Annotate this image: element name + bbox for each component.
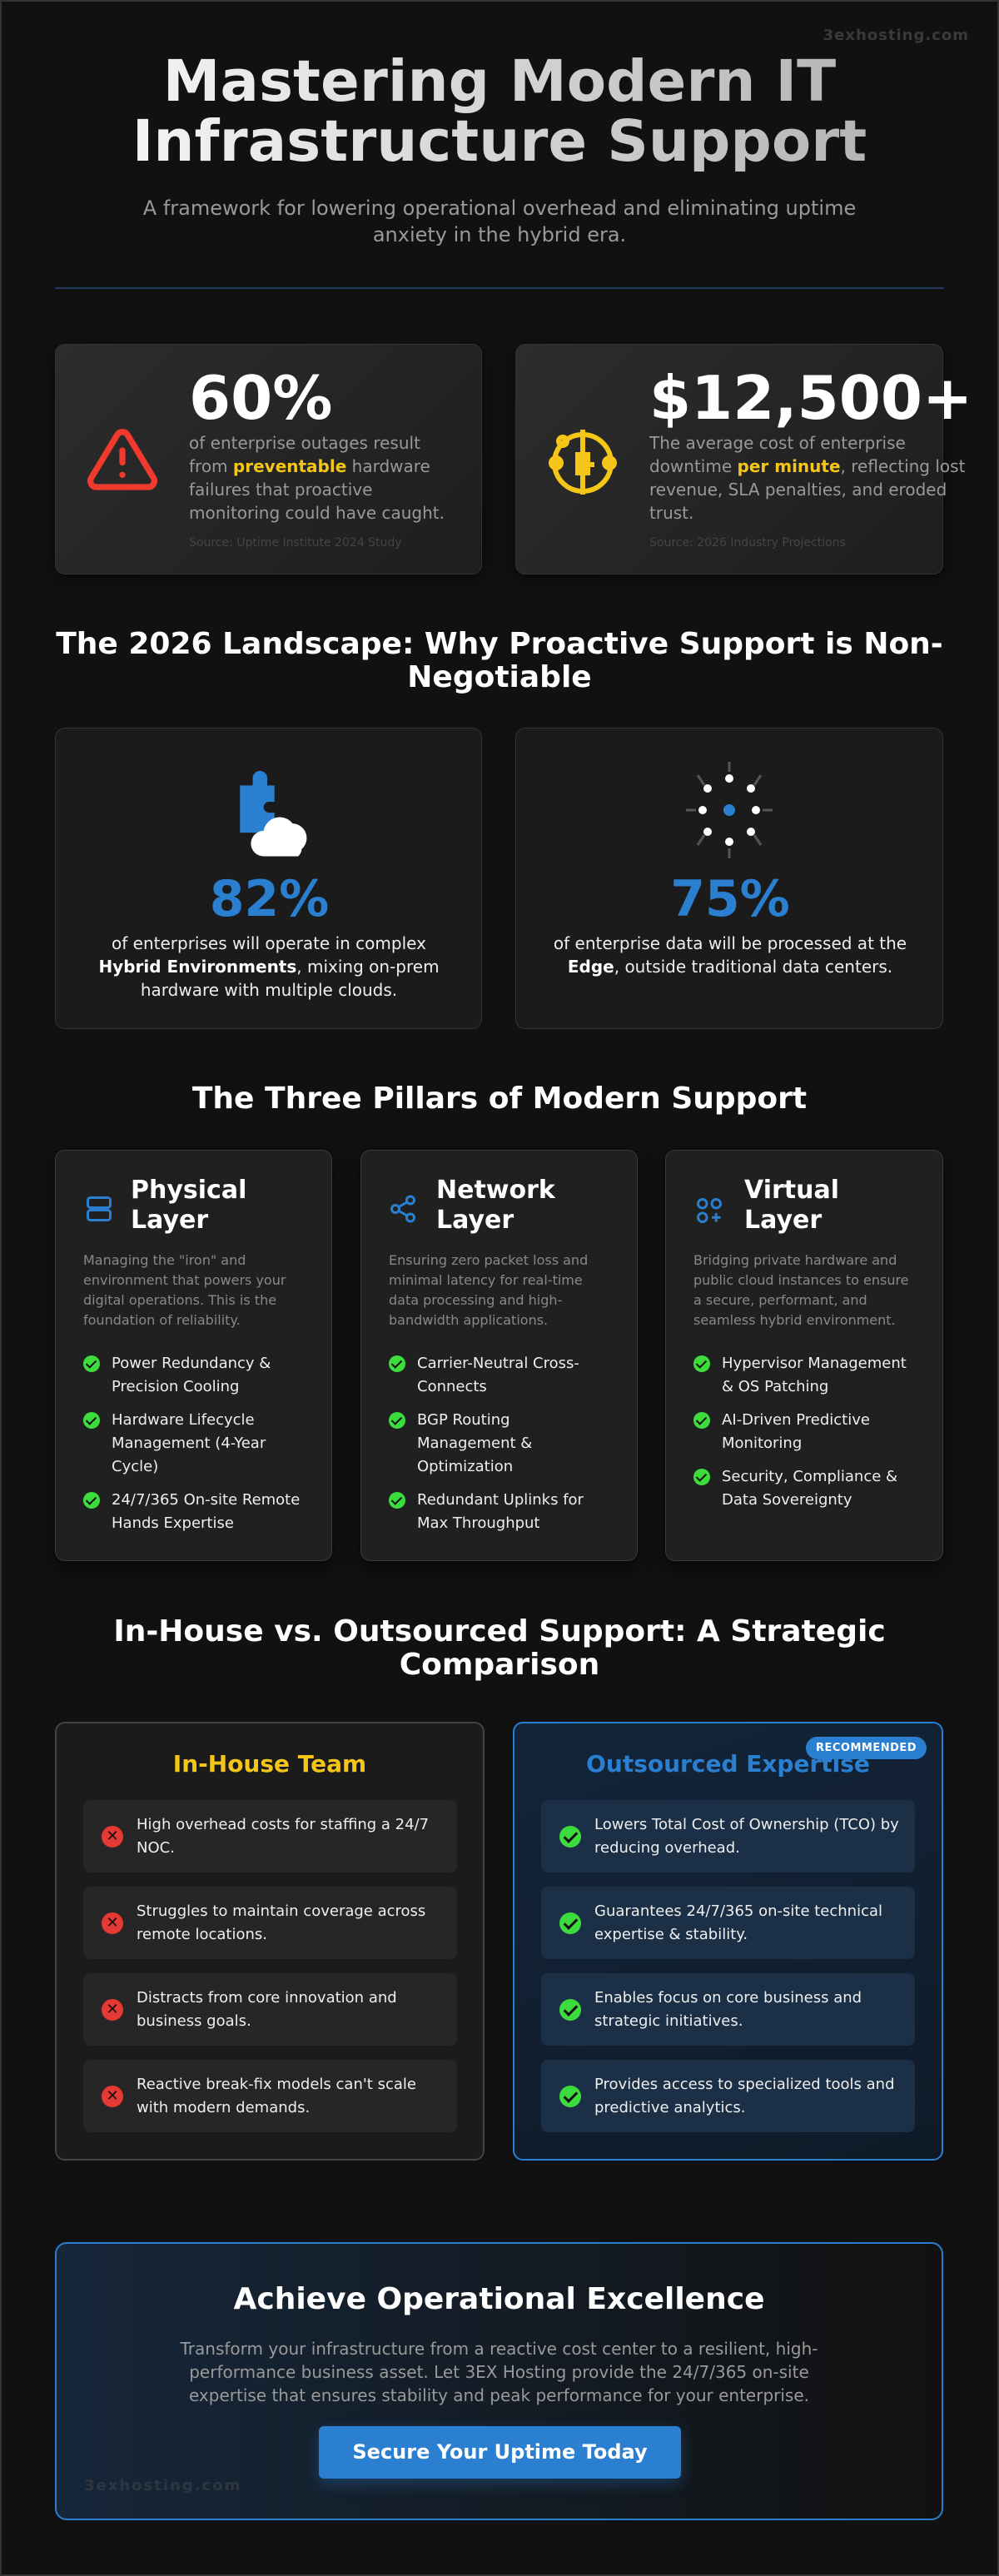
heading: comparison — [113, 1614, 886, 1682]
watermark bottom: 3exhosting.com — [84, 2477, 241, 2494]
checklist — [83, 1355, 300, 1532]
landscape card: edge: of enterprise data will be processed at the Edge, outside traditional data centers. — [554, 933, 907, 977]
heading: landscape — [56, 627, 943, 694]
panel: outsourced: Outsourced Expertise — [586, 1750, 870, 1778]
panel: outsourced: Lowers Total Cost of Ownership (TCO) by reducing overhead. — [594, 1815, 899, 1857]
icon: warning — [87, 429, 158, 490]
text block: Source: Uptime Institute 2024 Study — [189, 536, 402, 550]
icon: server — [87, 1196, 112, 1221]
subtitle: A framework for lowering operational overhead and eliminating uptime anxiety in the hybrid era. — [143, 196, 856, 246]
button — [319, 2426, 681, 2479]
heading: landscape: Negotiable — [407, 660, 592, 694]
checklist: AI-Driven Predictive Monitoring — [722, 1411, 870, 1452]
panel: in-house — [55, 1722, 485, 2161]
text block: The average cost of enterprise downtime per minute, reflecting lost revenue, SLA penalties, and eroded trust. — [649, 433, 965, 523]
stat card: 60% — [55, 344, 482, 574]
panel: in-house: Struggles to maintain coverage across remote locations. — [137, 1902, 425, 1943]
pillar: virtual: Virtual — [744, 1176, 839, 1205]
CTA panel: Transform your infrastructure from a reactive cost center to a resilient, high-performance business asset. Let 3EX Hosting provide the 24/7/365 on-site expertise that ensures stability and peak performance for your enterprise. — [181, 2339, 818, 2405]
checklist: Security, Compliance & Data Sovereignty — [722, 1468, 897, 1509]
text block — [189, 363, 445, 550]
watermark top: 3exhosting.com — [823, 27, 969, 44]
CTA panel: Achieve Operational Excellence — [234, 2282, 764, 2316]
panel: outsourced: Enables focus on core business and strategic initiatives. — [594, 1988, 862, 2030]
title: Infrastructure Support — [132, 108, 867, 175]
CTA panel — [55, 2242, 943, 2520]
pillar: network: Network — [436, 1176, 555, 1205]
icon: puzzle + cloud — [240, 771, 306, 856]
title: Mastering Modern IT — [163, 48, 836, 115]
panel: outsourced — [513, 1722, 943, 2161]
landscape card: hybrid: 82% — [210, 870, 329, 928]
text block: 60% — [189, 363, 332, 433]
icon: share — [390, 1196, 415, 1222]
badge: RECOMMENDED — [816, 1742, 917, 1754]
landscape card: hybrid — [55, 728, 482, 1029]
pillar: virtual: Bridging private hardware and public cloud instances to ensure a secure, performant, and seamless hybrid environment. — [693, 1252, 909, 1328]
pillar: physical: Physical — [131, 1176, 246, 1205]
landscape card: edge — [515, 728, 943, 1029]
pillar: network: Ensuring zero packet loss and minimal latency for real-time data processing and high-bandwidth applications. — [389, 1252, 588, 1328]
checklist: Hypervisor Management & OS Patching — [722, 1355, 907, 1395]
checklist: Power Redundancy & Precision Cooling — [112, 1355, 271, 1395]
icon: yellow target — [549, 430, 617, 495]
panel: outsourced: Guarantees 24/7/365 on-site technical expertise & stability. — [594, 1902, 882, 1943]
pillar: virtual: Layer — [744, 1206, 822, 1235]
checklist: 24/7/365 On-site Remote Hands Expertise — [112, 1491, 300, 1532]
pillar: physical — [55, 1150, 332, 1561]
panel: in-house: ✕ — [106, 1827, 119, 1845]
panel: in-house: Distracts from core innovation and business goals. — [137, 1988, 397, 2030]
panel: outsourced: Provides access to specialized tools and predictive analytics. — [594, 2075, 895, 2116]
checklist: Redundant Uplinks for Max Throughput — [417, 1491, 584, 1532]
panel: in-house: High overhead costs for staffing a 24/7 NOC. — [137, 1815, 429, 1857]
landscape card: edge: 75% — [670, 870, 790, 928]
checklist — [389, 1355, 584, 1532]
panel: in-house: ✕ — [106, 1913, 119, 1932]
checklist: Carrier-Neutral Cross-Connects — [417, 1355, 579, 1395]
pillar: physical: Managing the "iron" and environment that powers your digital operations. This is the foundation of reliability. — [83, 1252, 286, 1328]
heading: pillars: The Three Pillars of Modern Support — [192, 1082, 807, 1116]
panel: in-house: ✕ — [106, 2000, 119, 2018]
icon: radial dots — [686, 762, 773, 858]
text block — [649, 363, 972, 550]
landscape card: hybrid: of enterprises will operate in complex Hybrid Environments, mixing on-prem hardware with multiple clouds. — [98, 933, 440, 1000]
panel: in-house: In-House Team — [173, 1750, 366, 1778]
icon: apps — [697, 1198, 722, 1223]
panel: in-house: ✕ — [106, 2086, 119, 2105]
pillar: network: Layer — [436, 1206, 514, 1235]
panel: in-house: Reactive break-fix models can't scale with modern demands. — [137, 2075, 416, 2116]
pillar: virtual — [665, 1150, 943, 1561]
heading: comparison: In-House vs. Outsourced Support: A Strategic — [113, 1614, 886, 1649]
badge — [806, 1737, 927, 1759]
heading: comparison: Comparison — [400, 1648, 599, 1682]
checklist: Hardware Lifecycle Management (4-Year Cycle) — [112, 1411, 266, 1475]
button: Secure Your Uptime Today — [352, 2440, 648, 2464]
pillar: physical: Layer — [131, 1206, 208, 1235]
checklist: BGP Routing Management & Optimization — [417, 1411, 532, 1475]
text block: $12,500+ — [649, 363, 972, 433]
text block: of enterprise outages result from preventable hardware failures that proactive monitoring could have caught. — [189, 433, 445, 523]
checklist — [693, 1355, 907, 1509]
heading: landscape: The 2026 Landscape: Why Proactive Support is Non- — [56, 627, 943, 661]
pillar: network — [360, 1150, 638, 1561]
stat card: $12,500+ — [515, 344, 943, 574]
text block: Source: 2026 Industry Projections — [649, 536, 846, 550]
title — [0, 52, 999, 172]
